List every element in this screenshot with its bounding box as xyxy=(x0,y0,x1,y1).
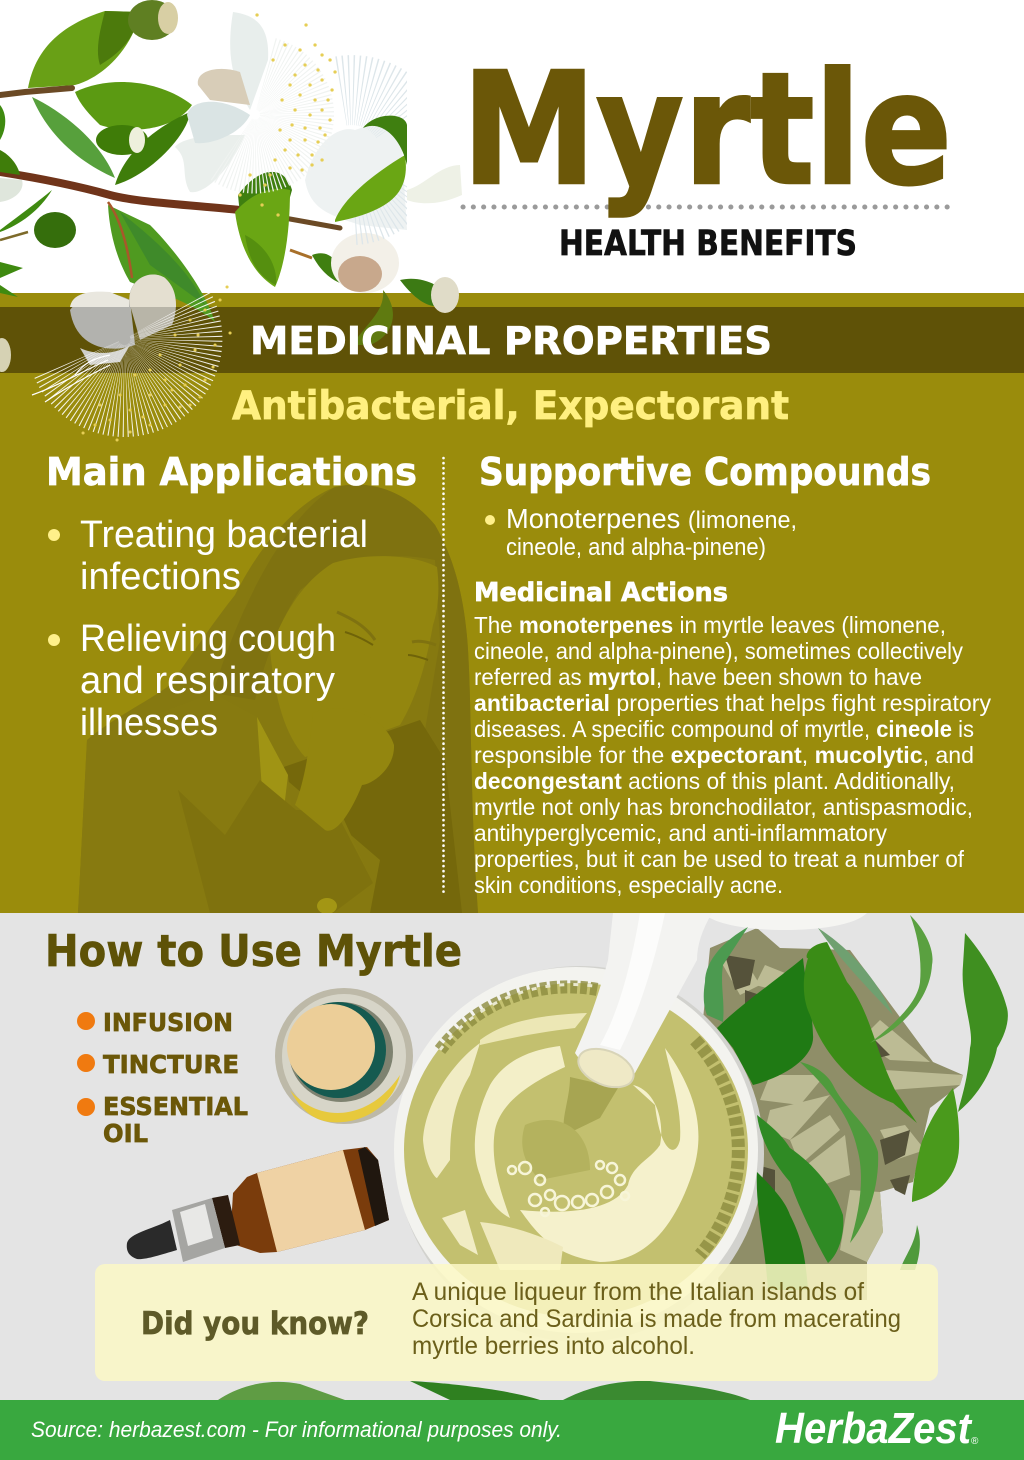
body text: medicinal actions xyxy=(474,612,991,898)
list item 1: infections xyxy=(80,556,241,598)
list item 1 xyxy=(80,514,368,598)
compound list item: cineole, and alpha-pinene) xyxy=(506,534,766,561)
callout text xyxy=(412,1278,901,1360)
dotted column divider xyxy=(442,458,445,893)
body text: medicinal actions: skin conditions, especially acne. xyxy=(474,872,783,898)
heading: medicinal properties: MEDICINAL PROPERTIES xyxy=(250,319,772,363)
dried leaves pile xyxy=(700,928,963,1300)
heading: main applications: Main Applications xyxy=(46,450,417,494)
body text: medicinal actions: antihyperglycemic, and anti-inflammatory xyxy=(474,820,887,846)
list: ways to use xyxy=(77,1008,248,1148)
callout text: Corsica and Sardinia is made from macerating xyxy=(412,1305,901,1333)
bullet: infusion xyxy=(77,1012,95,1030)
faded flower behind title xyxy=(407,165,462,203)
buds xyxy=(0,0,459,372)
body text: medicinal actions: decongestant actions of this plant. Additionally, xyxy=(474,768,955,794)
label: essential oil: ESSENTIAL xyxy=(103,1092,248,1121)
leaves xyxy=(0,11,393,345)
heading: how to use myrtle: How to Use Myrtle xyxy=(45,926,462,977)
body text: medicinal actions: diseases. A specific compound of myrtle, cineole is xyxy=(474,716,974,742)
bullet icon xyxy=(485,515,495,525)
footer bar xyxy=(0,1400,1024,1460)
callout text: myrtle berries into alcohol. xyxy=(412,1332,695,1360)
branch stems xyxy=(0,88,340,228)
body text: medicinal actions: myrtle not only has bronchodilator, antispasmodic, xyxy=(474,794,973,820)
flower: back right xyxy=(305,90,408,230)
panel: medicinal properties background xyxy=(0,293,1024,913)
label: essential oil xyxy=(103,1092,248,1148)
subtitle: health benefits: HEALTH BENEFITS xyxy=(559,224,857,264)
label: tincture: TINCTURE xyxy=(103,1050,239,1079)
title: Myrtle: Myrtle xyxy=(462,39,952,220)
dropper bottle xyxy=(127,1147,389,1262)
panel: supportive compounds xyxy=(474,450,991,898)
cork jar xyxy=(275,988,413,1124)
body text: medicinal actions: cineole, and alpha-pinene), sometimes collectively xyxy=(474,638,963,664)
compound list item: Monoterpenes (limonene, xyxy=(506,503,797,534)
bullet: tincture xyxy=(77,1054,95,1072)
body text: medicinal actions: properties, but it can be used to treat a number of xyxy=(474,846,965,872)
bullet: essential oil xyxy=(77,1098,95,1116)
label: infusion: INFUSION xyxy=(103,1008,233,1037)
callout text: A unique liqueur from the Italian islands of xyxy=(412,1278,864,1306)
heading: supportive compounds: Supportive Compounds xyxy=(479,450,931,494)
bowl xyxy=(394,966,764,1342)
body text: medicinal actions: The monoterpenes in myrtle leaves (limonene, xyxy=(474,612,946,638)
illustration: bowl, herbs and bottles xyxy=(127,913,1008,1400)
list item 2: illnesses xyxy=(80,702,218,744)
list item 1: Treating bacterial xyxy=(80,514,368,556)
pouring spout xyxy=(573,913,712,1095)
green leaves xyxy=(218,915,1008,1400)
flower: front xyxy=(175,12,335,215)
callout heading: Did you know? xyxy=(141,1306,369,1342)
compound list item xyxy=(506,503,797,561)
flower: lower, over band xyxy=(32,274,230,440)
bullet icon 2 xyxy=(48,634,60,646)
logo: HerbaZest: HerbaZest xyxy=(775,1404,973,1453)
subheading: antibacterial, expectorant: Antibacterial, Expectorant xyxy=(232,384,789,429)
list item 2 xyxy=(80,618,336,744)
logo: HerbaZest: ® xyxy=(971,1436,979,1447)
dotted divider under title xyxy=(463,204,953,210)
white rim at top xyxy=(703,913,867,930)
body text: medicinal actions: antibacterial properties that helps fight respiratory xyxy=(474,690,991,716)
list item 2: and respiratory xyxy=(80,660,335,702)
body text: medicinal actions: referred as myrtol, have been shown to have xyxy=(474,664,922,690)
panel: main applications xyxy=(46,450,417,744)
bullet icon 1 xyxy=(48,529,60,541)
illustration: myrtle branch and flowers xyxy=(0,0,462,440)
footer source text: Source: herbazest.com - For informational purposes only. xyxy=(31,1417,562,1442)
list item 2: Relieving cough xyxy=(80,618,336,660)
heading: medicinal actions: Medicinal Actions xyxy=(474,578,728,608)
panel: how to use background xyxy=(0,913,1024,1400)
center green leaf xyxy=(235,172,292,287)
dark title band xyxy=(0,307,1024,373)
background: white header xyxy=(0,0,1024,293)
illustration: coughing woman xyxy=(78,485,478,914)
body text: medicinal actions: responsible for the expectorant, mucolytic, and xyxy=(474,742,974,768)
label: essential oil: OIL xyxy=(103,1119,148,1148)
callout: did you know xyxy=(95,1264,938,1381)
